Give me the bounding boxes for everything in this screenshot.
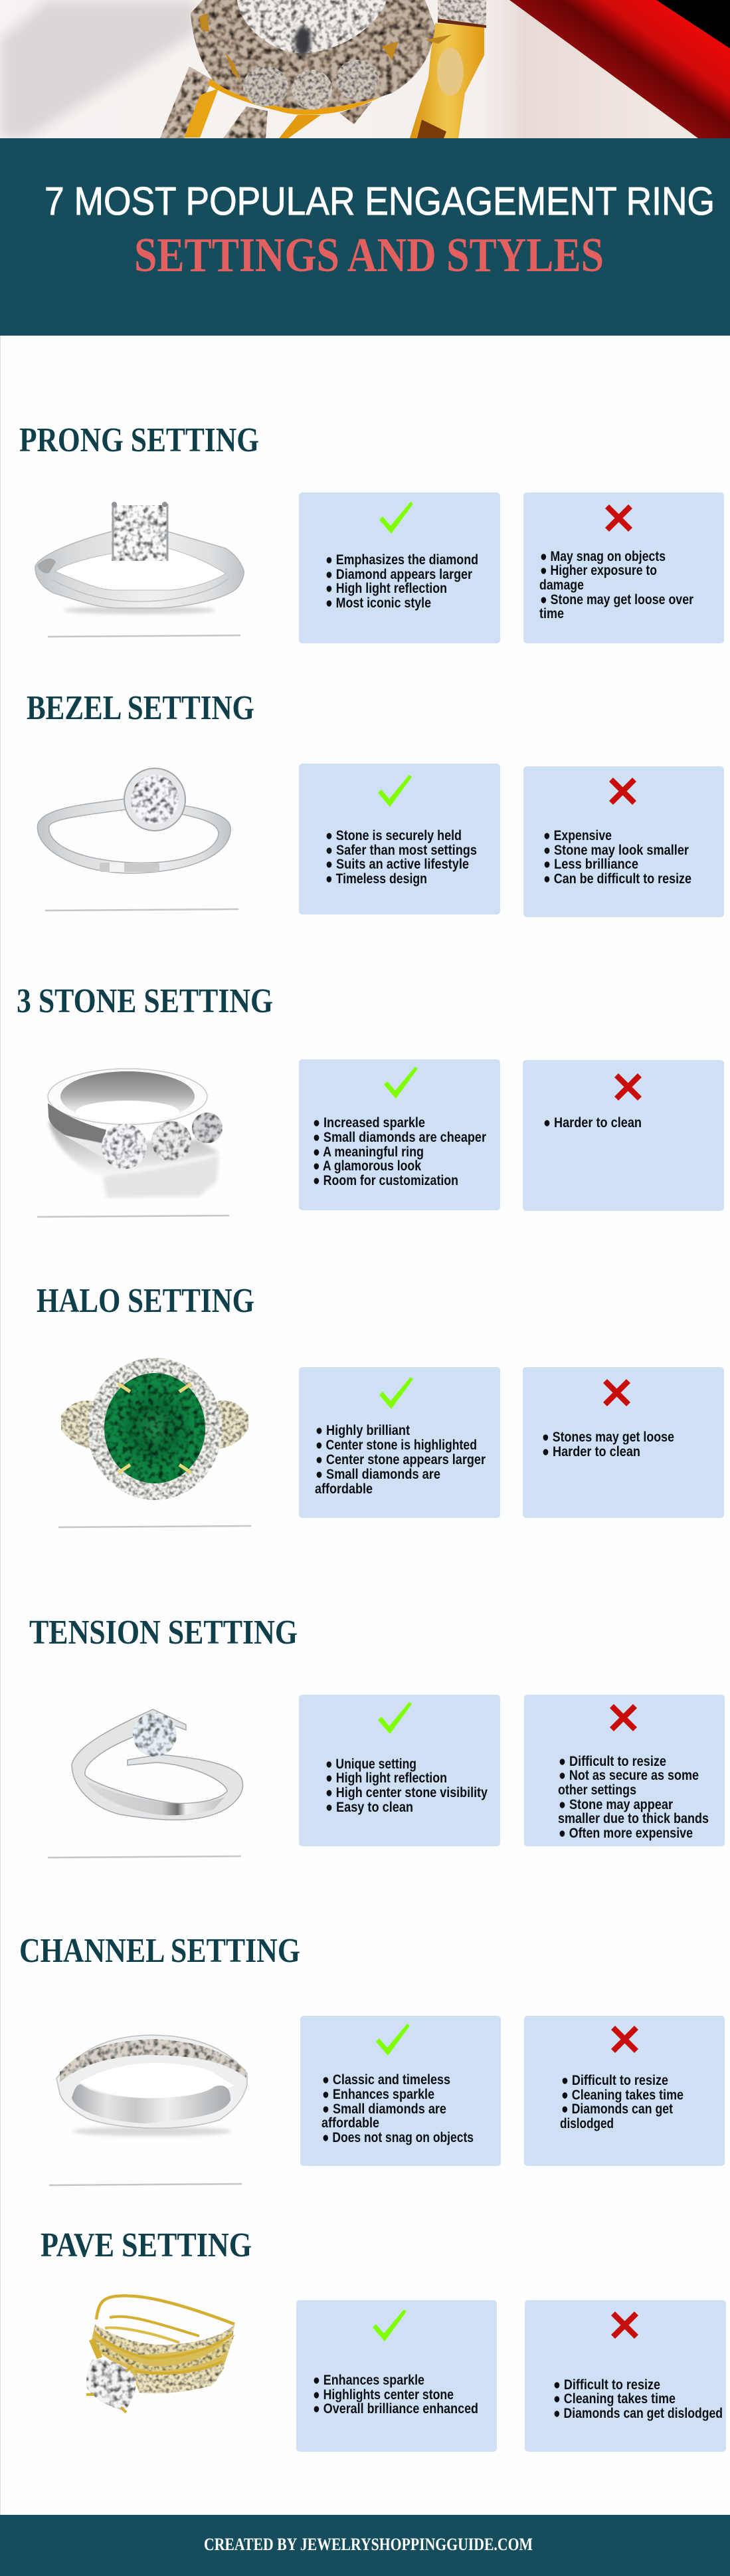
heading: BEZEL SETTING	[27, 689, 254, 727]
ring image: pave	[86, 2296, 234, 2413]
panel: 3 stone pros	[299, 1059, 500, 1210]
cons list	[543, 827, 691, 887]
cons list	[560, 2072, 684, 2131]
panel: channel cons	[524, 2016, 725, 2166]
cons list: ● Higher exposure to	[540, 562, 657, 578]
pros list: ● Does not snag on objects	[322, 2129, 474, 2145]
divider line	[49, 2184, 242, 2185]
pros list	[325, 552, 478, 611]
panel: pave cons	[525, 2300, 726, 2452]
pros list: ● Safer than most settings	[325, 842, 477, 858]
panel: tension cons	[524, 1695, 725, 1846]
cons list: ● Harder to clean	[543, 1115, 642, 1130]
title line 2: SETTINGS AND STYLES	[134, 228, 604, 282]
pros list: ● Timeless design	[325, 871, 427, 887]
cons list: ● Harder to clean	[542, 1444, 640, 1459]
panel: tension pros	[299, 1695, 500, 1846]
panel: halo pros	[299, 1367, 500, 1518]
heading: HALO SETTING	[37, 1282, 254, 1320]
divider line	[48, 635, 240, 637]
pros list: ● High center stone visibility	[325, 1784, 488, 1800]
panel: channel pros	[300, 2016, 501, 2166]
divider line	[37, 1216, 229, 1217]
pros list: ● Easy to clean	[325, 1799, 413, 1815]
pros list: ● Emphasizes the diamond	[325, 552, 478, 568]
pros list: ● A meaningful ring	[313, 1144, 424, 1160]
divider line	[48, 1856, 241, 1858]
cons list: other settings	[558, 1782, 636, 1798]
panel: halo cons	[523, 1367, 724, 1518]
cons list: time	[539, 605, 564, 621]
icon: cross	[612, 1706, 635, 1729]
icon: cross	[607, 506, 630, 530]
cons list: damage	[539, 577, 584, 593]
cons list: dislodged	[560, 2115, 614, 2131]
pros list	[321, 2072, 474, 2145]
section: tension setting	[29, 1614, 725, 1858]
cons list	[539, 548, 694, 621]
pros list: ● Increased sparkle	[313, 1115, 425, 1130]
pros list	[313, 2372, 478, 2416]
cons list: ● Can be difficult to resize	[543, 871, 691, 887]
pros list: ● Most iconic style	[325, 595, 431, 611]
pros list: ● Small diamonds are	[316, 1466, 440, 1482]
pros list: ● Room for customization	[313, 1172, 458, 1188]
panel: pave pros	[296, 2300, 497, 2452]
cons list: ● Not as secure as some	[559, 1767, 699, 1783]
icon: check	[378, 775, 412, 807]
cons list: ● Difficult to resize	[553, 2377, 660, 2393]
cons list: ● Difficult to resize	[561, 2072, 668, 2088]
section: halo setting	[37, 1282, 724, 1527]
pros list: ● High light reflection	[325, 1770, 447, 1786]
pros list: affordable	[321, 2115, 379, 2131]
pros list	[313, 1115, 487, 1188]
heading: TENSION SETTING	[29, 1614, 298, 1652]
pros list: ● Stone is securely held	[325, 827, 462, 843]
pros list: affordable	[315, 1481, 373, 1497]
cons list: ● Cleaning takes time	[553, 2391, 676, 2407]
divider line	[58, 1526, 251, 1527]
cons list	[542, 1429, 674, 1459]
pros list: ● Highlights center stone	[313, 2387, 454, 2403]
panel: bezel cons	[523, 766, 724, 917]
hero photo: gold diamond halo ring	[0, 0, 730, 138]
cons list	[558, 1753, 709, 1841]
icon: check	[379, 1377, 413, 1409]
cons list: ● Stone may get loose over	[540, 591, 694, 607]
pros list: ● Suits an active lifestyle	[325, 856, 469, 872]
pros list	[325, 1756, 488, 1815]
pros list: ● Overall brilliance enhanced	[313, 2401, 478, 2416]
cons list: ● Stones may get loose	[542, 1429, 674, 1445]
section: prong setting	[19, 421, 724, 643]
footer band	[0, 2515, 730, 2576]
ring image: tension	[72, 1709, 243, 1820]
panel: prong pros	[299, 492, 500, 643]
icon: check	[378, 1702, 412, 1734]
ring image: channel	[56, 2035, 247, 2136]
section: channel setting	[19, 1932, 725, 2185]
cons list: ● Cleaning takes time	[561, 2087, 684, 2103]
panel: bezel pros	[299, 764, 500, 914]
icon: check	[379, 502, 413, 534]
pros list: ● Enhances sparkle	[313, 2372, 424, 2388]
pros list	[325, 827, 477, 887]
pros list: ● High light reflection	[325, 580, 447, 596]
pros list	[315, 1422, 486, 1497]
pros list: ● Diamond appears larger	[325, 566, 473, 582]
icon: cross	[611, 780, 634, 803]
pros list: ● Center stone appears larger	[316, 1451, 486, 1467]
panel: prong cons	[523, 492, 724, 643]
cons list: ● Diamonds can get	[561, 2101, 673, 2117]
panel: 3 stone cons	[523, 1060, 724, 1211]
icon: check	[373, 2309, 407, 2341]
heading: PAVE SETTING	[41, 2226, 252, 2264]
icon: cross	[613, 2028, 636, 2051]
icon: check	[376, 2024, 410, 2056]
icon: cross	[616, 1075, 640, 1099]
heading: 3 STONE SETTING	[17, 982, 273, 1020]
pros list: ● A glamorous look	[313, 1158, 421, 1174]
cons list: ● May snag on objects	[540, 548, 666, 564]
icon: cross	[605, 1381, 628, 1404]
ring image: bezel	[37, 768, 230, 873]
icon: cross	[613, 2313, 636, 2337]
heading: PRONG SETTING	[19, 421, 259, 459]
divider line	[45, 909, 238, 911]
pros list: ● Small diamonds are cheaper	[313, 1129, 487, 1145]
pros list: ● Center stone is highlighted	[316, 1437, 477, 1453]
heading: CHANNEL SETTING	[19, 1932, 300, 1970]
section: 3 stone setting	[17, 982, 724, 1217]
ring image: prong	[35, 502, 244, 614]
cons list: ● Stone may look smaller	[543, 842, 689, 858]
title band	[0, 138, 730, 336]
pros list: ● Classic and timeless	[322, 2072, 450, 2088]
cons list: ● Often more expensive	[559, 1825, 693, 1841]
pros list: ● Enhances sparkle	[322, 2086, 434, 2102]
footer credit: CREATED BY JEWELRYSHOPPINGGUIDE.COM	[204, 2535, 533, 2554]
cons list: ● Stone may appear	[559, 1796, 674, 1812]
pros list: ● Small diamonds are	[322, 2101, 446, 2117]
icon: check	[384, 1067, 418, 1099]
pros list: ● Unique setting	[325, 1756, 416, 1772]
pros list: ● Highly brilliant	[316, 1422, 410, 1438]
ring image: emerald halo	[61, 1358, 248, 1500]
section: pave setting	[41, 2226, 726, 2452]
section: bezel setting	[27, 689, 724, 917]
ring image: three stone	[48, 1069, 223, 1198]
cons list	[553, 2377, 723, 2421]
cons list: ● Expensive	[543, 827, 612, 843]
cons list: ● Less brilliance	[543, 856, 638, 872]
cons list: ● Difficult to resize	[559, 1753, 666, 1769]
